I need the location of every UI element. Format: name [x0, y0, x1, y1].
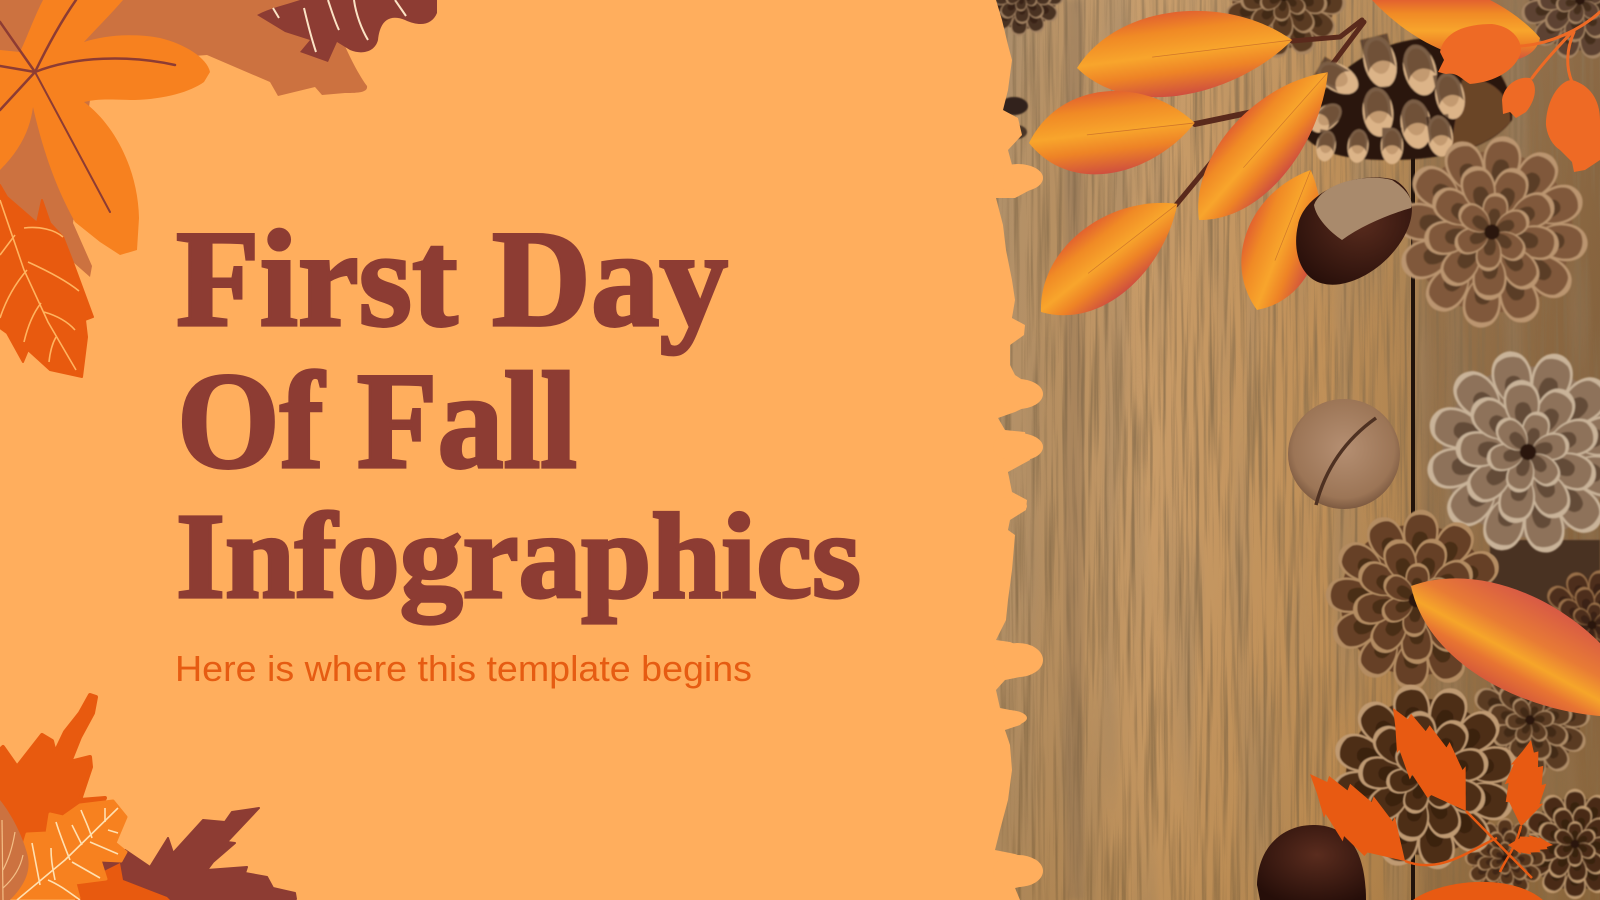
dark pine cone: [1300, 33, 1512, 164]
tan leaf: [0, 0, 367, 277]
brown pine cone: [1383, 123, 1600, 341]
decoration: top-left leaves: [0, 0, 437, 377]
orange leaves: [1017, 0, 1540, 340]
walnut: [1288, 399, 1400, 509]
chestnut: [1296, 177, 1412, 285]
red-orange leaf with veins: [0, 185, 93, 377]
orange maple leaf: [0, 0, 210, 255]
lower pine cone: [1304, 657, 1544, 897]
leaf stems: [1176, 20, 1364, 205]
red-orange oak leaf: [0, 695, 105, 880]
brown leaf with veins: [257, 0, 437, 62]
title: Infographics: [176, 489, 861, 624]
title: First Day: [176, 202, 728, 355]
pine cones behind: [976, 0, 1600, 899]
title: [176, 202, 861, 624]
wood planks: [980, 0, 1600, 900]
decoration: bottom-right leaves: [1291, 693, 1553, 900]
torn paper edge: [0, 0, 1043, 900]
brown leaf: [98, 808, 296, 899]
decoration: top-right berries: [1438, 12, 1600, 172]
subtitle: Here is where this template begins: [175, 648, 752, 689]
pale pine cone: [1399, 323, 1600, 581]
pine cone with leaf: [1319, 503, 1513, 697]
decoration: bottom-left leaves: [0, 695, 296, 900]
dark chestnut: [1257, 825, 1366, 900]
orange oak leaf with veins: [8, 801, 126, 900]
bottom orange-red leaf: [75, 863, 170, 900]
large leaf over cone: [1389, 542, 1600, 756]
photo: wooden table with autumn still life: [976, 0, 1600, 900]
title: Of Fall: [177, 344, 577, 497]
tan leaf with veins: [0, 800, 29, 900]
